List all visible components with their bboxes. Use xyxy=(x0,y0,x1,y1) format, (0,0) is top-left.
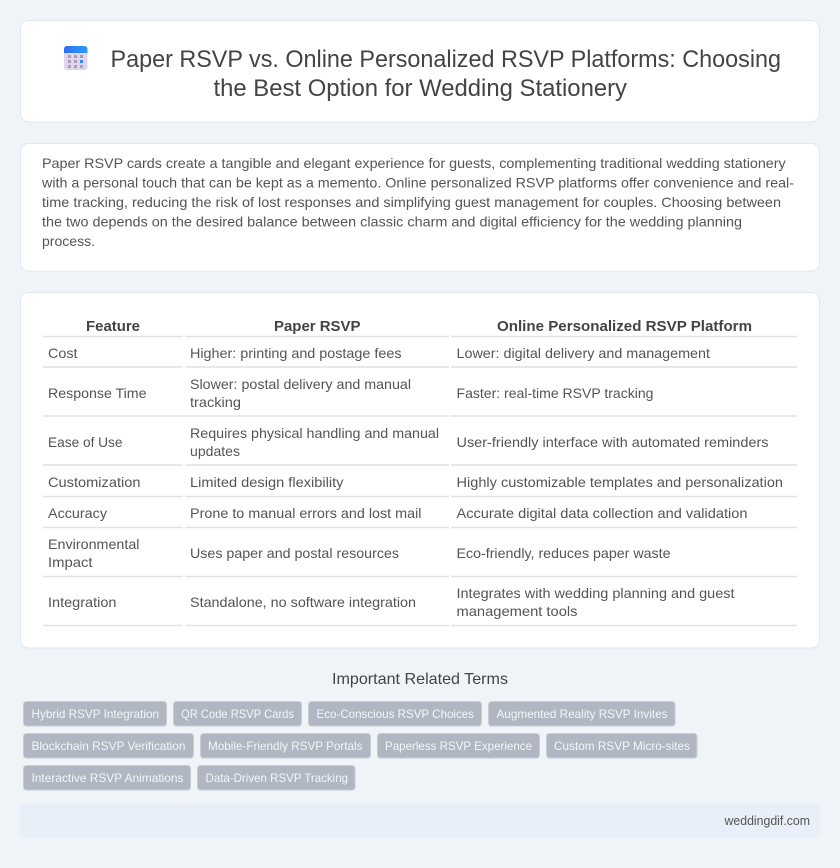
row: integration: management tools xyxy=(456,603,578,619)
row: cost: Lower: digital delivery and management xyxy=(456,345,710,361)
tag: Mobile-Friendly RSVP Portals xyxy=(200,734,370,758)
title: Paper RSVP vs. Online Personalized RSVP Platforms: Choosing xyxy=(110,46,781,73)
row: cost: Higher: printing and postage fees xyxy=(190,345,402,361)
heading: important related terms: Important Related Terms xyxy=(332,671,508,688)
tag: QR Code RSVP Cards: QR Code RSVP Cards xyxy=(181,707,294,721)
row: environmental impact: Eco-friendly, reduces paper waste xyxy=(456,545,671,561)
row: cost: Cost xyxy=(48,345,78,361)
footer xyxy=(20,804,820,838)
tag: Interactive RSVP Animations xyxy=(24,766,190,790)
tag: QR Code RSVP Cards xyxy=(174,702,302,726)
tag: Mobile-Friendly RSVP Portals: Mobile-Friendly RSVP Portals xyxy=(208,739,362,753)
footer: weddingdif.com xyxy=(724,813,810,828)
icon: calendar xyxy=(64,46,88,70)
row: customization: Customization xyxy=(48,474,140,490)
tag: Hybrid RSVP Integration xyxy=(24,702,166,726)
row: response time: Faster: real-time RSVP tracking xyxy=(456,385,654,401)
tag: Custom RSVP Micro-sites: Custom RSVP Micro-sites xyxy=(554,739,690,753)
row: integration: Standalone, no software integration xyxy=(190,594,416,610)
tag: Interactive RSVP Animations: Interactive RSVP Animations xyxy=(32,771,184,785)
row: environmental impact: Environmental xyxy=(48,536,140,552)
intro text: the two depends on the desired balance between classic charm and digital efficiency for the wedding planning xyxy=(42,214,742,230)
tag: Eco-Conscious RSVP Choices xyxy=(308,702,482,726)
row: customization: Limited design flexibility xyxy=(190,474,344,490)
row: response time: Response Time xyxy=(48,385,147,401)
row: accuracy: Prone to manual errors and lost mail xyxy=(190,505,422,521)
row: response time: tracking xyxy=(190,394,241,410)
tag: Blockchain RSVP Verification: Blockchain RSVP Verification xyxy=(32,739,186,753)
row: customization xyxy=(48,474,783,490)
row: response time: Slower: postal delivery and manual xyxy=(190,376,411,392)
intro text: with a personal touch that can be kept as a memento. Online personalized RSVP platforms offer convenience and real- xyxy=(41,174,794,190)
row: accuracy: Accurate digital data collection and validation xyxy=(456,505,748,521)
table header: Paper RSVP xyxy=(274,318,360,335)
panel: title card xyxy=(20,20,820,122)
row: accuracy: Accuracy xyxy=(48,505,107,521)
panel: comparison table xyxy=(20,292,820,648)
intro text xyxy=(41,155,794,249)
intro text: process. xyxy=(42,233,95,249)
row: customization: Highly customizable templates and personalization xyxy=(456,474,783,490)
tag: Custom RSVP Micro-sites xyxy=(546,734,697,758)
tag: Paperless RSVP Experience xyxy=(378,734,540,758)
table header: Feature xyxy=(86,318,140,335)
table header: Online Personalized RSVP Platform xyxy=(497,318,752,335)
row: environmental impact: Impact xyxy=(48,554,93,570)
row: response time xyxy=(48,376,654,410)
row: ease of use: Ease of Use xyxy=(48,434,123,450)
tag: Augmented Reality RSVP Invites xyxy=(488,702,675,726)
intro text: time tracking, reducing the risk of lost responses and simplifying guest management for couples. Choosing between xyxy=(42,194,781,210)
panel: intro paragraph xyxy=(20,144,820,271)
row: accuracy xyxy=(48,505,748,521)
tag: Data-Driven RSVP Tracking: Data-Driven RSVP Tracking xyxy=(206,771,348,785)
row: integration: Integration xyxy=(48,594,116,610)
row: ease of use: updates xyxy=(190,443,240,459)
tag: Eco-Conscious RSVP Choices: Eco-Conscious RSVP Choices xyxy=(316,707,474,721)
row: integration xyxy=(48,585,735,619)
table header xyxy=(86,318,752,335)
row: ease of use: Requires physical handling and manual xyxy=(190,425,439,441)
tag: Augmented Reality RSVP Invites: Augmented Reality RSVP Invites xyxy=(496,707,668,721)
tag: Blockchain RSVP Verification xyxy=(24,734,194,758)
row: ease of use xyxy=(48,425,768,459)
row: environmental impact: Uses paper and postal resources xyxy=(190,545,399,561)
tag: Data-Driven RSVP Tracking xyxy=(198,766,355,790)
row: cost xyxy=(48,345,710,361)
tags xyxy=(24,702,697,790)
row: environmental impact xyxy=(48,536,671,570)
row: ease of use: User-friendly interface with automated reminders xyxy=(456,434,768,450)
title: the Best Option for Wedding Stationery xyxy=(214,75,627,102)
row: integration: Integrates with wedding planning and guest xyxy=(456,585,735,601)
intro text: Paper RSVP cards create a tangible and elegant experience for guests, complementing traditional wedding stationery xyxy=(42,155,786,171)
tag: Hybrid RSVP Integration: Hybrid RSVP Integration xyxy=(32,707,159,721)
tag: Paperless RSVP Experience: Paperless RSVP Experience xyxy=(385,739,532,753)
title xyxy=(110,46,781,102)
